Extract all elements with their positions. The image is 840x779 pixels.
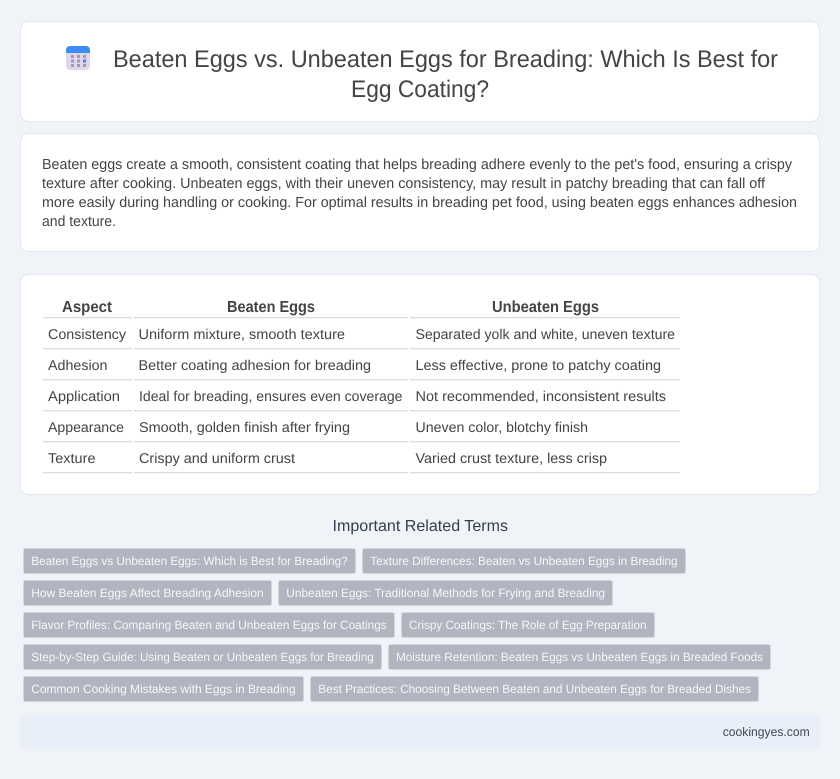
row: adhesion: Better coating adhesion for breading (138, 358, 371, 374)
row: consistency (43, 327, 680, 349)
row: texture: Texture (48, 451, 96, 467)
panel: introduction text: Beaten eggs create a smooth, consistent coating that helps breading adhere evenly to the pet's food, ensuring a crispy (42, 157, 793, 173)
row: adhesion: Adhesion (48, 358, 108, 374)
table header: Unbeaten Eggs (492, 299, 599, 316)
tag: Best Practices: Choosing Between Beaten and Unbeaten Eggs for Breaded Dishes (318, 682, 751, 696)
tag (362, 548, 686, 574)
tag: Step-by-Step Guide: Using Beaten or Unbeaten Eggs for Breading (31, 650, 374, 664)
tag (310, 676, 758, 702)
tag (24, 612, 394, 638)
tag: Texture Differences: Beaten vs Unbeaten Eggs in Breading (370, 554, 678, 568)
tag: Beaten Eggs vs Unbeaten Eggs: Which is Best for Breading? (31, 554, 348, 568)
heading: important related terms: Important Related Terms (332, 518, 508, 535)
panel: introduction text: more easily during handling or cooking. For optimal results in breading pet food, using beaten eggs enhances adhesion (42, 195, 797, 211)
row: appearance: Uneven color, blotchy finish (416, 420, 588, 436)
row: texture: Crispy and uniform crust (139, 451, 295, 467)
row: appearance (43, 420, 680, 442)
tag (388, 644, 770, 670)
tag (402, 612, 654, 638)
row: adhesion: Less effective, prone to patchy coating (416, 358, 661, 374)
table header: Aspect (62, 299, 113, 316)
panel: related term tags (24, 548, 770, 702)
table header: Beaten Eggs (227, 299, 315, 316)
panel: introduction text (20, 134, 820, 252)
tag (24, 644, 382, 670)
tag: Common Cooking Mistakes with Eggs in Breading (31, 682, 296, 696)
tag: Flavor Profiles: Comparing Beaten and Unbeaten Eggs for Coatings (31, 618, 387, 632)
row: consistency: Consistency (48, 327, 127, 343)
row: application: Application (48, 389, 120, 405)
row: texture: Varied crust texture, less crisp (416, 451, 607, 467)
row: application (43, 389, 680, 411)
icon: calendar (66, 46, 90, 70)
panel: title header (20, 22, 820, 122)
panel: introduction text: and texture. (42, 214, 116, 230)
tag (24, 548, 356, 574)
title: Beaten Eggs vs. Unbeaten Eggs for Breading: Which Is Best for (113, 46, 778, 73)
tag (24, 580, 272, 606)
tag: Crispy Coatings: The Role of Egg Preparation (409, 618, 646, 632)
title: Egg Coating? (351, 76, 489, 103)
tag: How Beaten Eggs Affect Breading Adhesion (31, 586, 264, 600)
tag: Moisture Retention: Beaten Eggs vs Unbeaten Eggs in Breaded Foods (396, 650, 763, 664)
panel: introduction text: texture after cooking. Unbeaten eggs, with their uneven consistency, may result in patchy breading that can fall off (42, 176, 766, 192)
table header (43, 299, 680, 318)
row: consistency: Separated yolk and white, uneven texture (416, 327, 675, 343)
tag (278, 580, 612, 606)
tag (24, 676, 304, 702)
row: consistency: Uniform mixture, smooth texture (138, 327, 345, 343)
tag: Unbeaten Eggs: Traditional Methods for Frying and Breading (286, 586, 605, 600)
footer: cookingyes.com (723, 725, 810, 739)
row: application: Not recommended, inconsistent results (416, 389, 666, 405)
row: texture (43, 451, 680, 473)
title (113, 46, 778, 103)
row: adhesion (43, 358, 680, 380)
row: appearance: Smooth, golden finish after frying (139, 420, 350, 436)
row: appearance: Appearance (48, 420, 124, 436)
footer (20, 715, 820, 749)
panel: comparison table (20, 274, 820, 494)
row: application: Ideal for breading, ensures even coverage (139, 389, 403, 405)
